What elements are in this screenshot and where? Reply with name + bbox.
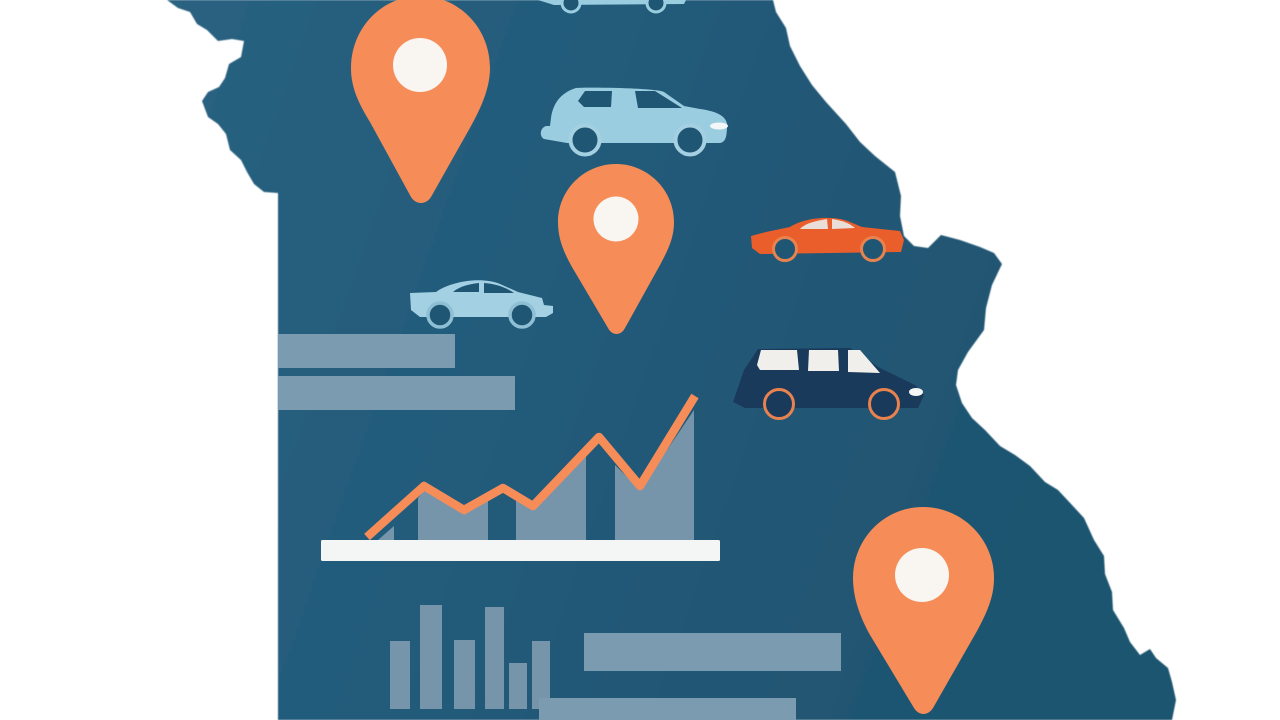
bar: upper long bbox=[278, 376, 515, 410]
bar: upper short bbox=[278, 334, 455, 368]
chart baseline bbox=[321, 540, 720, 561]
car: top, cut off bbox=[538, 0, 686, 12]
bar: lower right bbox=[584, 633, 841, 671]
car: navy van bbox=[733, 348, 924, 418]
chart columns bbox=[378, 410, 694, 540]
small bar chart bbox=[390, 605, 550, 709]
pin: bottom right bbox=[853, 507, 994, 714]
map: state silhouette bbox=[167, 0, 1176, 720]
bar: bottom bbox=[539, 698, 796, 720]
pin: top left bbox=[351, 0, 490, 203]
car: orange sedan bbox=[751, 218, 904, 260]
car: light blue wagon bbox=[541, 88, 728, 154]
chart trend line bbox=[367, 396, 695, 537]
pin: center bbox=[558, 164, 674, 334]
car: light blue sedan bbox=[410, 280, 553, 327]
chart: trend line over bars bbox=[321, 396, 720, 561]
